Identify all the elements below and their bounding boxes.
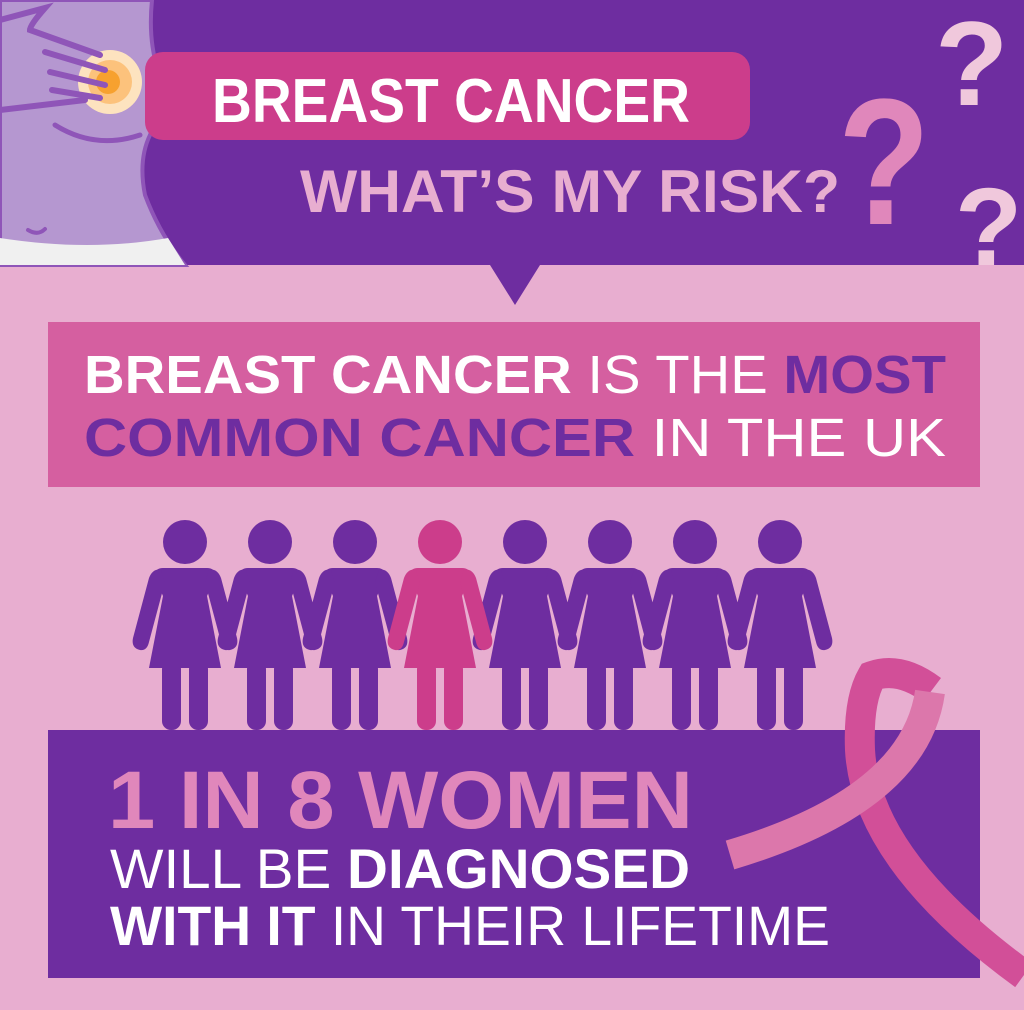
illustration: torso checking breast xyxy=(0,0,185,265)
question marks xyxy=(838,0,1022,289)
title bar: BREAST CANCER xyxy=(212,67,690,136)
bottom box: 1 IN 8 WOMEN xyxy=(108,755,693,846)
bottom box xyxy=(48,730,980,978)
fact box xyxy=(48,322,980,487)
subtitle: WHAT’S MY RISK? xyxy=(300,158,840,225)
highlighted woman xyxy=(388,520,492,730)
title bar xyxy=(145,52,750,140)
women figures xyxy=(133,520,832,730)
question marks: ? xyxy=(955,166,1022,289)
pink ribbon xyxy=(730,673,1024,975)
question marks: ? xyxy=(838,62,930,263)
fact box: BREAST CANCER IS THE MOST xyxy=(84,345,946,405)
bottom box: WITH IT IN THEIR LIFETIME xyxy=(110,894,830,957)
bottom box: WILL BE DIAGNOSED xyxy=(110,837,690,900)
question marks: ? xyxy=(935,0,1008,131)
speech pointer xyxy=(490,265,540,305)
fact box: COMMON CANCER IN THE UK xyxy=(84,408,946,468)
header band xyxy=(0,0,1024,265)
